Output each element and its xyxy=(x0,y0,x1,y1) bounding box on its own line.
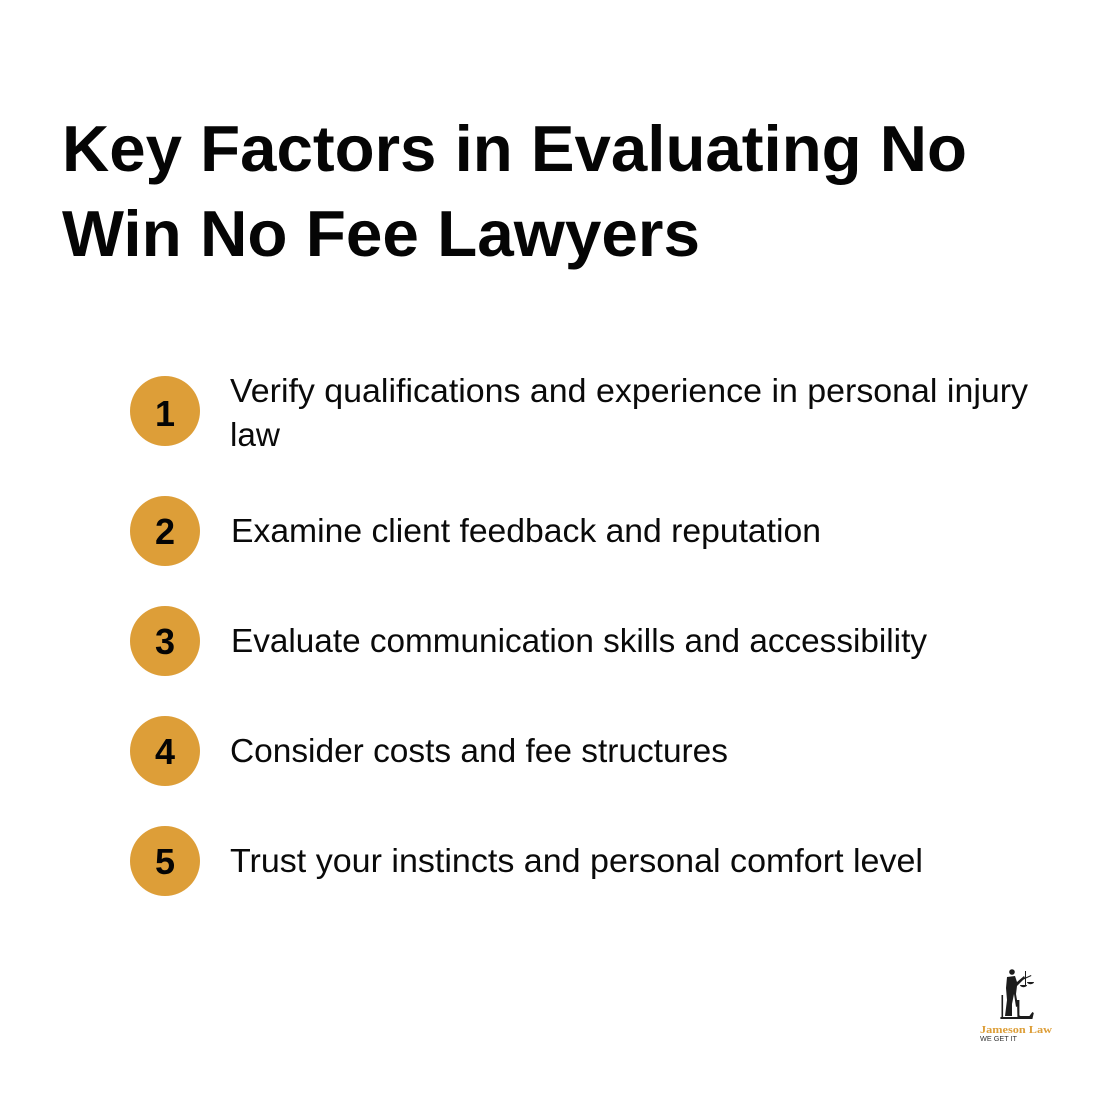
item 2 text: Examine client feedback and reputation xyxy=(231,512,821,549)
item 1 text xyxy=(230,372,1029,453)
number badge 4 xyxy=(130,716,200,786)
title: Key Factors in Evaluating No xyxy=(62,112,967,185)
item 1 xyxy=(130,372,1029,453)
item 1 text: law xyxy=(230,416,280,453)
number badge 3 xyxy=(130,606,200,676)
number badge 5 xyxy=(130,826,200,896)
title: Win No Fee Lawyers xyxy=(62,197,700,270)
item 4 xyxy=(130,716,728,786)
number badge 3: 3 xyxy=(155,621,175,662)
list of key factors xyxy=(130,372,1029,896)
number badge 5: 5 xyxy=(155,841,175,882)
logo: Jameson Law xyxy=(980,969,1052,1043)
title xyxy=(62,112,967,270)
number badge 1: 1 xyxy=(155,393,175,434)
item 3 xyxy=(130,606,927,676)
item 5 xyxy=(130,826,923,896)
item 5 text: Trust your instincts and personal comfort level xyxy=(230,842,923,879)
item 3 text: Evaluate communication skills and accessibility xyxy=(231,622,927,659)
item 4 text: Consider costs and fee structures xyxy=(230,732,728,769)
item 1 text: Verify qualifications and experience in personal injury xyxy=(230,372,1029,409)
number badge 2 xyxy=(130,496,200,566)
item 2 xyxy=(130,496,821,566)
logo wordmark: Jameson Law xyxy=(980,1024,1052,1036)
number badge 4: 4 xyxy=(155,731,175,772)
number badge 2: 2 xyxy=(155,511,175,552)
logo tagline: WE GET IT xyxy=(980,1036,1018,1043)
icon: lady justice figure xyxy=(1000,969,1034,1019)
number badge 1 xyxy=(130,376,200,446)
